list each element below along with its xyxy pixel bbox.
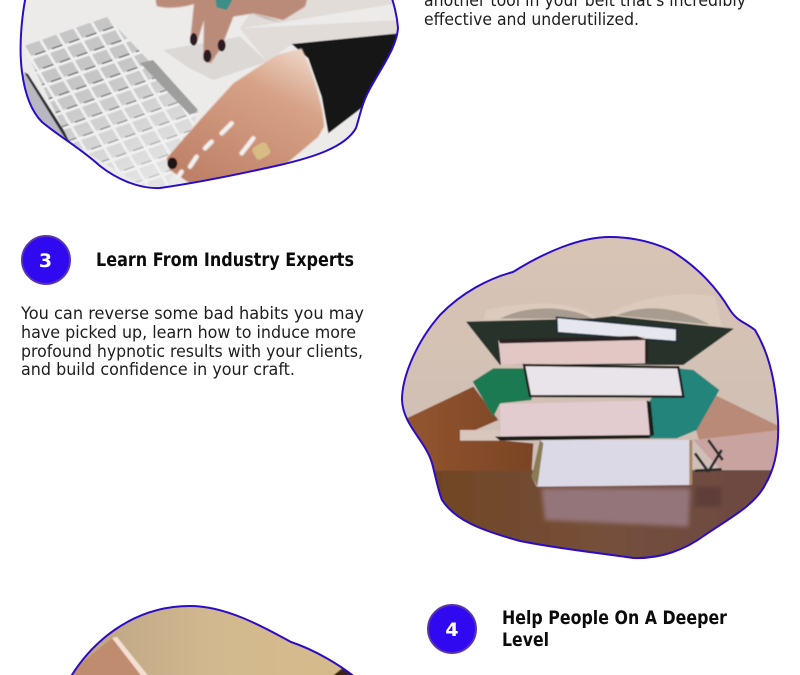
open book cover xyxy=(466,316,734,365)
nails xyxy=(190,33,226,62)
laptop edge xyxy=(23,74,66,138)
step 4 heading xyxy=(502,607,728,651)
step 3 body text xyxy=(20,304,364,380)
step 3 body text: You can reverse some bad habits you may xyxy=(20,304,364,324)
ring xyxy=(252,142,271,160)
open book pages xyxy=(483,295,722,327)
step 4 heading: Help People On A Deeper xyxy=(502,607,728,629)
image blob: person behind stack of books xyxy=(400,230,800,563)
book 3 xyxy=(524,365,683,397)
step 4 badge: 4 xyxy=(445,619,459,641)
space bar strip xyxy=(140,60,198,115)
green shirt xyxy=(473,368,532,417)
step 3 body text: and build confidence in your craft. xyxy=(21,360,295,380)
top book xyxy=(557,317,677,342)
glasses xyxy=(695,440,723,472)
upper hand xyxy=(155,0,308,63)
top right text block xyxy=(424,0,746,30)
step 3 badge xyxy=(22,236,70,284)
step 3 body text: profound hypnotic results with your clients, xyxy=(21,342,363,362)
top right text block: effective and underutilized. xyxy=(424,10,639,30)
step 3 badge: 3 xyxy=(39,250,52,272)
image blob: bottom photo xyxy=(70,605,354,675)
step 4 badge xyxy=(428,605,476,653)
black sleeve xyxy=(292,33,398,133)
arms xyxy=(407,387,533,471)
book 4 xyxy=(500,401,650,437)
table xyxy=(434,470,771,558)
step 3 body text: have picked up, learn how to induce more xyxy=(21,323,356,343)
trackpad xyxy=(163,37,267,80)
typing hand xyxy=(167,48,324,183)
white finger gaps xyxy=(178,123,253,177)
keyboard keys xyxy=(23,17,198,190)
book 2 xyxy=(498,337,648,365)
image blob: hands typing on laptop xyxy=(20,0,399,190)
step 4 heading: Level xyxy=(502,629,549,651)
step 3 heading: Learn From Industry Experts xyxy=(96,249,354,271)
bottom book xyxy=(532,440,692,487)
